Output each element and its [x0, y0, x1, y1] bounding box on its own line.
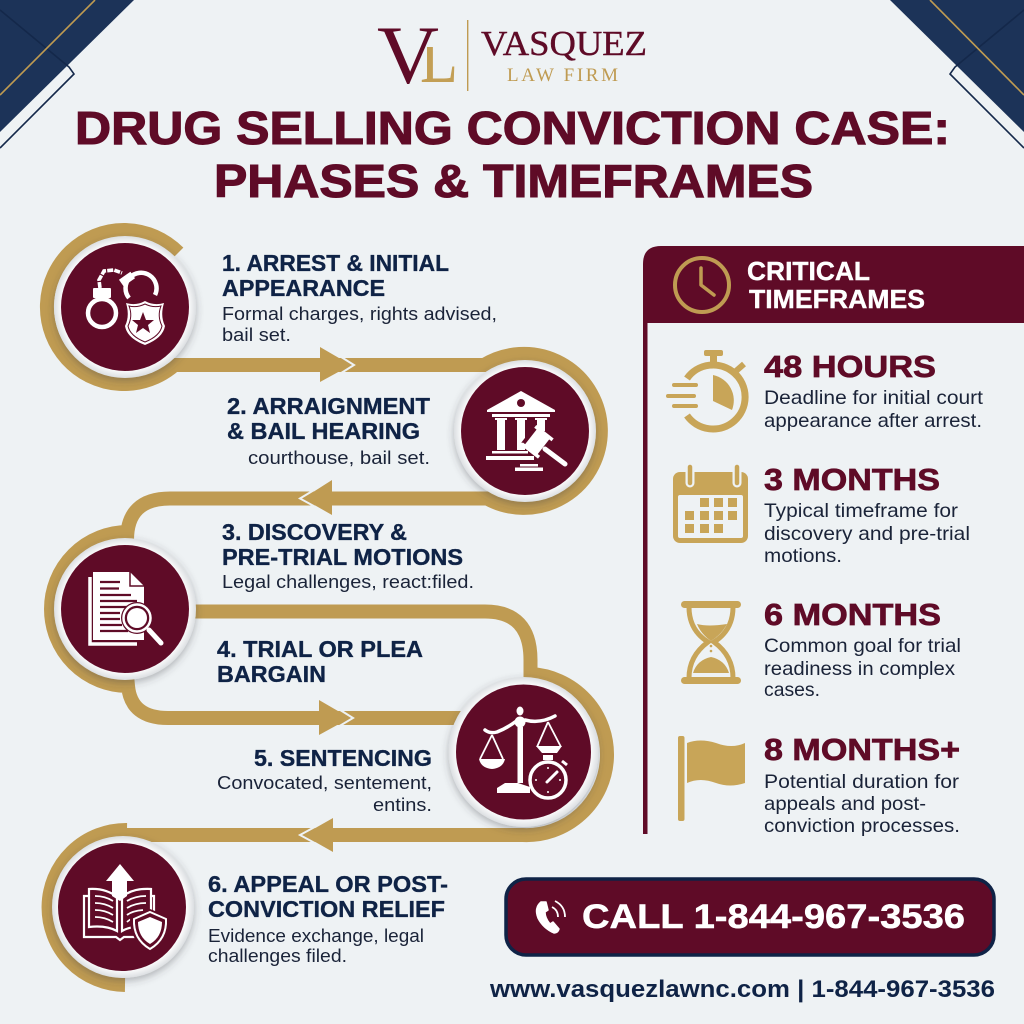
step 3 text: Legal challenges, react:filed. [222, 571, 474, 592]
call button: CALL 1-844-967-3536 [582, 898, 965, 936]
step 5 text: 5. SENTENCING [254, 745, 432, 771]
step 1 text: APPEARANCE [222, 275, 385, 301]
step 1 text [222, 250, 497, 345]
step 6 text [208, 871, 448, 966]
step 2 text: & BAIL HEARING [227, 418, 420, 444]
step 2 text: 2. ARRAIGNMENT [227, 393, 430, 419]
item: 6 months [681, 597, 961, 701]
arrow 3 [319, 698, 353, 737]
step 6 text: CONVICTION RELIEF [208, 896, 445, 922]
winding gold path with arrows [47, 230, 607, 985]
step 3 text: PRE-TRIAL MOTIONS [222, 544, 463, 570]
item: 3 months [673, 462, 970, 567]
arrow 4 [300, 816, 335, 854]
call button [506, 879, 994, 955]
panel header: TIMEFRAMES [749, 284, 925, 314]
step 6 text: 6. APPEAL OR POST- [208, 871, 448, 897]
step 5 icon: scales and stopwatch [448, 677, 598, 827]
step 1 text: 1. ARREST & INITIAL [222, 250, 449, 276]
panel header [643, 246, 1024, 323]
step 6 text: challenges filed. [208, 945, 347, 966]
item: 8 months+: appeals and post- [764, 793, 926, 815]
logo: Vasquez Law Firm: L [420, 8, 458, 100]
logo: Vasquez Law Firm: LAW FIRM [507, 65, 618, 86]
step 1 icon: handcuffs and badge [54, 236, 196, 378]
logo: Vasquez Law Firm [378, 20, 646, 91]
title: DRUG SELLING CONVICTION CASE: [75, 102, 950, 154]
title [75, 102, 950, 207]
item: 48 hours: Deadline for initial court [764, 387, 984, 409]
arrow 1 [320, 345, 354, 385]
panel header: CRITICAL [747, 256, 870, 286]
title: PHASES & TIMEFRAMES [214, 155, 813, 207]
step 6 icon: open book, arrow and shield [52, 836, 194, 978]
icon: phone [537, 901, 565, 933]
item: 48 hours: appearance after arrest. [764, 410, 982, 432]
step 5 text: entins. [373, 794, 432, 815]
logo: Vasquez Law Firm: VASQUEZ [481, 24, 647, 63]
step 1 text: Formal charges, rights advised, [222, 303, 497, 324]
step 4 text [217, 636, 423, 687]
item: 8 months+: 8 MONTHS+ [764, 732, 960, 767]
step 4 text: 4. TRIAL OR PLEA [217, 636, 423, 662]
decorative corner: top right [890, 0, 1024, 148]
panel: critical timeframes [643, 246, 1024, 837]
step 2 text: courthouse, bail set. [248, 447, 430, 468]
logo: Vasquez Law Firm: V [377, 9, 439, 101]
decorative corner: top left [0, 0, 134, 148]
item: 8 months+: conviction processes. [764, 815, 960, 837]
arrow 2 [300, 478, 334, 517]
item: 3 months: Typical timeframe for [764, 500, 959, 522]
step 6 text: Evidence exchange, legal [208, 925, 424, 946]
step 3 text: 3. DISCOVERY & [222, 519, 407, 545]
item: 3 months: motions. [764, 545, 842, 567]
item: 48 hours [668, 349, 984, 432]
step 3 text [222, 519, 474, 592]
item: 3 months: discovery and pre-trial [764, 523, 970, 545]
item: 3 months: 3 MONTHS [764, 462, 940, 497]
item: 6 months: cases. [764, 679, 820, 701]
item: 8 months+: Potential duration for [764, 771, 960, 793]
step 2 text [227, 393, 430, 468]
item: 6 months: Common goal for trial [764, 635, 961, 657]
step 1 text: bail set. [222, 324, 291, 345]
step 3 icon: document and magnifier [54, 538, 196, 680]
step 4 text: BARGAIN [217, 661, 326, 687]
step 2 icon: courthouse and gavel [454, 360, 596, 502]
item: 6 months: 6 MONTHS [764, 597, 941, 632]
website and phone footer: www.vasquezlawnc.com | 1-844-967-3536 [489, 976, 995, 1003]
item: 48 hours: 48 HOURS [764, 349, 936, 384]
step 5 text [217, 745, 432, 815]
item: 6 months: readiness in complex [764, 658, 955, 680]
step 5 text: Convocated, sentement, [217, 772, 432, 793]
item: 8 months+ [678, 732, 960, 837]
